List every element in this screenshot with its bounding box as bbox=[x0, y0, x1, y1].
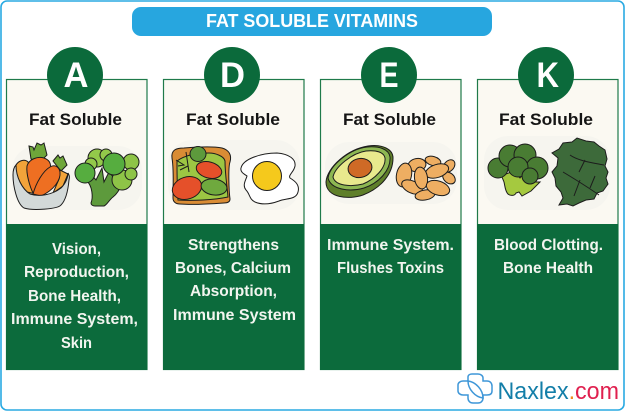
text: vitamin A benefits: Immune System, bbox=[11, 311, 138, 328]
text: vitamin A benefits: Reproduction, bbox=[24, 264, 129, 281]
badge: E: E bbox=[380, 56, 398, 95]
text: vitamin A benefits bbox=[11, 241, 138, 352]
text: vitamin K benefits: Bone Health bbox=[503, 260, 593, 277]
text: vitamin D benefits bbox=[173, 237, 296, 324]
text: vitamin K benefits bbox=[494, 237, 603, 277]
panel: vitamin D bbox=[163, 47, 304, 370]
text: vitamin D benefits: Immune System bbox=[173, 307, 296, 324]
icon: broccoli bbox=[488, 144, 548, 196]
text: vitamin K benefits: Blood Clotting. bbox=[494, 237, 603, 254]
badge: K bbox=[518, 47, 574, 103]
logo: Naxlex.com bbox=[458, 374, 619, 405]
title banner: FAT SOLUBLE VITAMINS bbox=[206, 10, 418, 31]
wordmark: Naxlex.com bbox=[498, 378, 619, 405]
text: vitamin A benefits: Skin bbox=[61, 335, 92, 352]
badge: D: D bbox=[220, 56, 245, 95]
icon: fried egg bbox=[241, 153, 298, 204]
heading: Fat Soluble A: Fat Soluble bbox=[29, 110, 122, 129]
panel: vitamin A bbox=[6, 47, 147, 370]
text: vitamin D benefits: Strengthens bbox=[188, 237, 279, 254]
title banner bbox=[132, 7, 492, 36]
icon: almonds bbox=[394, 155, 458, 202]
icon: spinach bbox=[552, 138, 608, 206]
heading: Fat Soluble K: Fat Soluble bbox=[499, 110, 593, 129]
text: vitamin D benefits: Absorption, bbox=[190, 283, 277, 300]
icon: carrots in bowl bbox=[13, 143, 69, 209]
badge: A: A bbox=[64, 56, 88, 95]
text: vitamin D benefits: Bones, Calcium bbox=[175, 260, 291, 277]
panel: vitamin E bbox=[320, 47, 461, 370]
heading: Fat Soluble D: Fat Soluble bbox=[186, 110, 280, 129]
text: vitamin E benefits bbox=[327, 237, 454, 277]
badge: A bbox=[47, 47, 103, 103]
badge: K: K bbox=[536, 56, 559, 95]
text: vitamin E benefits: Immune System. bbox=[327, 237, 454, 254]
icon: avocado half bbox=[326, 146, 393, 197]
icon: broccoli leaf bbox=[75, 149, 139, 206]
text: vitamin E benefits: Flushes Toxins bbox=[337, 260, 444, 277]
badge: D bbox=[204, 47, 260, 103]
heading: Fat Soluble E: Fat Soluble bbox=[343, 110, 436, 129]
badge: E bbox=[361, 47, 417, 103]
text: vitamin A benefits: Vision, bbox=[52, 241, 101, 258]
text: vitamin A benefits: Bone Health, bbox=[28, 288, 121, 305]
panel: vitamin K bbox=[477, 47, 618, 370]
icon: logo cross bbox=[458, 374, 492, 403]
icon: avocado toast bbox=[169, 146, 231, 204]
